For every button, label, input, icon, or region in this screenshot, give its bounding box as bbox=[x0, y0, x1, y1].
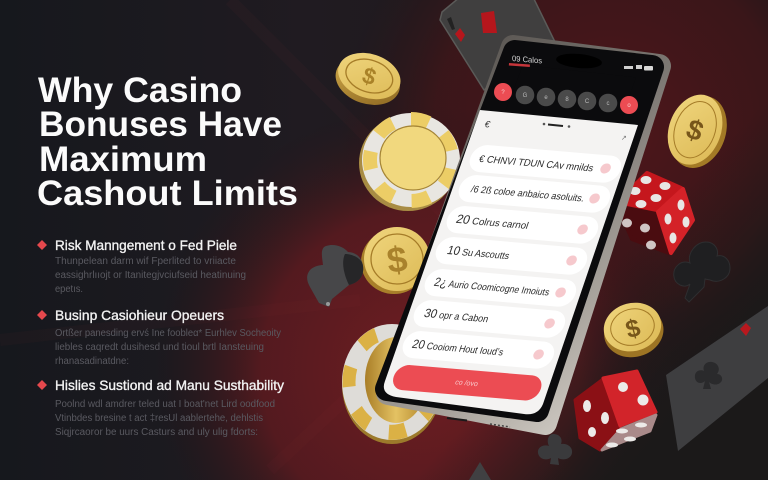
gold coin: lower right: $ bbox=[623, 314, 643, 344]
list row 7: 20 Cooiom Hout Ioudʼs bbox=[410, 337, 506, 358]
gold coin: middle: $ bbox=[384, 238, 410, 281]
body text: liebles caqredt dusihesd und tioul brtl Iansteuing bbox=[55, 342, 264, 353]
gold coin: top left: $ bbox=[359, 62, 380, 90]
bullet icon bbox=[37, 380, 47, 390]
category buttons: c bbox=[606, 101, 610, 107]
club icon: right bbox=[674, 242, 730, 302]
list row 6 bbox=[410, 299, 569, 339]
camera island bbox=[555, 52, 603, 70]
heading: Hislies Sustiond ad Manu Susthability bbox=[55, 377, 284, 393]
list row 2: /6 2ß coloe anbaico asoluits. bbox=[469, 184, 586, 205]
bullet section 2 bbox=[37, 307, 281, 367]
poker chip: upper bbox=[359, 111, 460, 211]
list row 1: € CHNVI TDUN CAv mnilds bbox=[477, 154, 595, 174]
bullet section 1 bbox=[37, 237, 246, 295]
body text bbox=[55, 328, 281, 367]
panel header bbox=[483, 119, 627, 142]
heading: Businp Casiohieur Opeuers bbox=[55, 307, 224, 323]
title: Bonuses Have bbox=[39, 105, 282, 144]
panel header: ↗ bbox=[621, 135, 627, 142]
list row 3: 20 Colrus carnol bbox=[454, 212, 531, 232]
white screen panel bbox=[384, 110, 638, 414]
poker chip: lower bbox=[337, 318, 447, 446]
category buttons: C bbox=[585, 99, 590, 105]
spade tip: bottom bbox=[469, 462, 491, 480]
body text: epetıs. bbox=[55, 284, 83, 295]
list row 5: 2¿ Aurio Coomicogne Imoiuts bbox=[432, 275, 552, 298]
panel header: € bbox=[483, 119, 492, 130]
smartphone bbox=[384, 47, 659, 427]
body text: Poolnd wdl amdrer teled uat I boat'net Lird oodfood bbox=[55, 399, 275, 410]
body text: rhanasadinatdne: bbox=[55, 356, 129, 367]
title: Maximum bbox=[39, 140, 207, 179]
body text: Ortßer panesding ervś Ine foobleα* Eurhlev Socheoity bbox=[55, 328, 281, 339]
red action button: ᴄᴏ /ᴏᴠᴏ bbox=[454, 377, 479, 388]
bullet icon bbox=[37, 310, 47, 320]
charging port and speaker bbox=[447, 418, 510, 427]
title: Why Casino bbox=[38, 71, 242, 110]
status bar: 09 Calos bbox=[512, 54, 542, 65]
gold coin: middle bbox=[361, 227, 430, 294]
body text: Vtinbdes bresine t act ‡resUl aablertehe, dehlstis bbox=[55, 413, 263, 424]
club icon: bottom bbox=[538, 434, 572, 465]
list row 3 bbox=[443, 205, 602, 245]
body text: eassighrlııojt or Itanitegjvciufseid heatinuing bbox=[55, 270, 246, 281]
gold coin: lower right bbox=[597, 296, 669, 364]
list row 7 bbox=[399, 330, 558, 370]
category buttons bbox=[494, 83, 638, 114]
title bbox=[37, 71, 298, 213]
list row 5 bbox=[421, 268, 580, 308]
gold coin: top left bbox=[329, 45, 407, 113]
gold coin: upper right bbox=[658, 87, 737, 176]
gold coin: upper right: $ bbox=[682, 113, 708, 148]
playing card: bottom right bbox=[666, 306, 768, 451]
category buttons: 8 bbox=[565, 97, 569, 103]
list row 6: 30 opr a Cabon bbox=[422, 306, 491, 325]
list row 2 bbox=[455, 174, 614, 214]
body text: Siqjrcaoror be uurs Casturs and uly ulig fdorts: bbox=[55, 427, 258, 438]
phone frame bbox=[388, 47, 659, 423]
3D club: left bbox=[307, 245, 363, 307]
dice: lower right bbox=[575, 371, 656, 450]
category buttons: G bbox=[523, 93, 528, 99]
bullet icon bbox=[37, 240, 47, 250]
red action button bbox=[390, 364, 545, 401]
list row 1 bbox=[466, 144, 625, 184]
body text: Thunpelean darm wif Fperlited to vriiacte bbox=[55, 256, 236, 267]
dice: upper right bbox=[617, 173, 693, 253]
playing card: top bbox=[440, 0, 555, 90]
body text bbox=[55, 256, 246, 295]
category buttons: ? bbox=[501, 90, 505, 96]
list row 4 bbox=[432, 236, 591, 276]
category buttons: o bbox=[627, 103, 631, 109]
list row 4: 10 Su Ascoutts bbox=[445, 243, 512, 262]
category buttons: e bbox=[544, 95, 548, 101]
title: Cashout Limits bbox=[37, 174, 298, 213]
status bar bbox=[509, 54, 653, 70]
phone screen bezel bbox=[387, 52, 652, 410]
body text bbox=[55, 399, 275, 438]
heading: Risk Manngement o Fed Piele bbox=[55, 237, 237, 253]
bullet section 3 bbox=[37, 377, 284, 438]
